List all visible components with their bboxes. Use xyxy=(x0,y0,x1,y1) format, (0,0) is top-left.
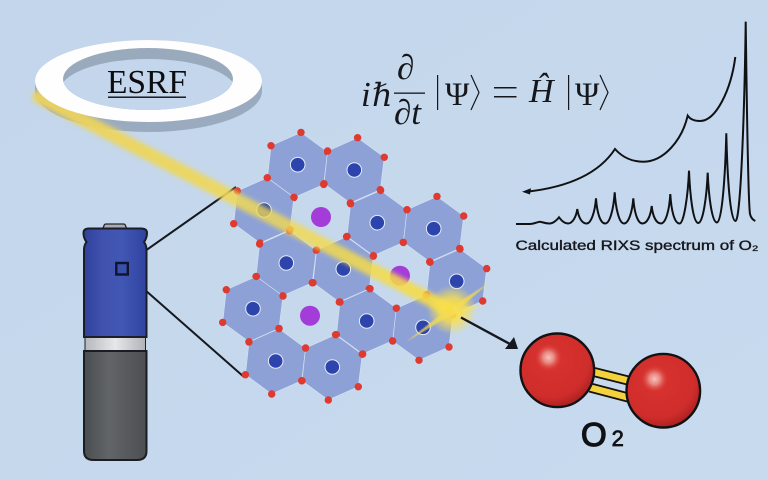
Schrodinger equation: i xyxy=(361,75,371,114)
double bond xyxy=(590,372,630,398)
ring underside shadow xyxy=(35,40,262,132)
battery gray section xyxy=(84,351,146,460)
hexagon cell 9 xyxy=(219,273,287,345)
ESRF ring xyxy=(35,40,262,123)
Schrodinger equation xyxy=(361,48,608,132)
oxygen atom left xyxy=(520,334,594,407)
purple atom 1 xyxy=(311,207,331,227)
hexagon cell 13 xyxy=(298,331,366,404)
Schrodinger equation: ∂t xyxy=(394,93,422,132)
Schrodinger equation: Ψ xyxy=(445,77,470,113)
Schrodinger equation: Ψ xyxy=(575,77,600,113)
battery terminal xyxy=(103,224,127,229)
Schrodinger equation: ℏ xyxy=(372,77,393,113)
hexagon cell 3 xyxy=(230,174,298,247)
arrow from beam to O2 xyxy=(461,318,518,349)
battery silver band xyxy=(85,338,146,350)
RIXS spectrum chart xyxy=(516,22,755,224)
hexagon cell 10 xyxy=(333,285,400,358)
hexagon cell 8 xyxy=(423,245,490,318)
x-ray beam xyxy=(39,97,489,342)
Schrodinger equation: Ĥ xyxy=(528,73,556,110)
oxygen atom right xyxy=(626,354,700,428)
spectrum caption: Calculated RIXS spectrum of O₂ xyxy=(516,238,758,253)
battery xyxy=(84,224,147,460)
hexagon cell 6 xyxy=(252,227,320,300)
hexagon cell 2 xyxy=(320,134,388,207)
ESRF label: ESRF xyxy=(107,64,187,101)
hexagon cell 4 xyxy=(343,187,411,259)
hexagon cell 12 xyxy=(242,325,309,398)
hexagon cell 7 xyxy=(309,233,377,306)
lattice of hexagons xyxy=(219,129,490,404)
spectrum peaks xyxy=(516,22,755,224)
O2 label: O2 xyxy=(581,416,624,453)
battery blue section xyxy=(84,228,147,337)
hexagon cell 1 xyxy=(264,129,331,201)
hexagon cell 5 xyxy=(400,193,467,265)
O2 molecule xyxy=(520,334,700,453)
zoom lines from battery to lattice xyxy=(128,187,244,377)
Schrodinger equation: ∂ xyxy=(397,48,414,87)
decay curve with arrow xyxy=(522,57,735,194)
beam flare xyxy=(406,283,489,342)
purple atom 3 xyxy=(300,306,320,326)
zoom square on battery xyxy=(116,263,128,274)
hexagon cell 11 xyxy=(389,291,457,364)
purple atom 2 xyxy=(390,266,410,286)
